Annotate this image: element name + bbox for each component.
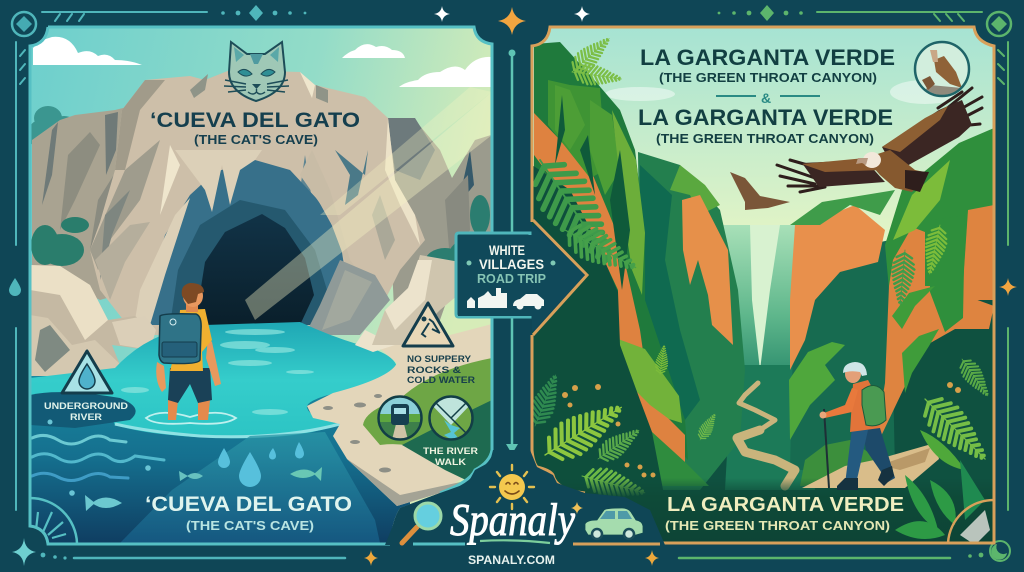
backpack <box>862 385 886 426</box>
waterfall light <box>750 225 780 370</box>
pale clouds <box>605 80 960 104</box>
sign text <box>477 242 546 286</box>
bottom right rule and dots <box>679 553 983 558</box>
sign text: VILLAGES <box>479 256 544 272</box>
underground river caption <box>44 401 128 423</box>
trekking pole <box>824 409 829 488</box>
sun beams <box>245 87 492 320</box>
river blob behind label <box>30 392 136 428</box>
gold sparkle logo <box>571 502 583 514</box>
ruff <box>863 152 881 168</box>
corner medallion top left <box>12 12 36 36</box>
river walk caption <box>423 446 478 468</box>
bottom left sparkle <box>12 538 36 566</box>
icon: car <box>513 294 544 310</box>
white sparkle left <box>434 6 450 22</box>
ferns <box>519 31 997 505</box>
icon: magnifying glass <box>402 503 441 543</box>
left canopy <box>534 42 688 460</box>
distant valley <box>715 225 805 375</box>
left moss right edge <box>612 110 645 295</box>
vulture small <box>730 172 790 210</box>
legs <box>168 400 210 420</box>
hiker rock <box>802 443 939 488</box>
moss lump <box>789 342 845 440</box>
shirt <box>170 309 212 371</box>
rocks on right shore <box>355 255 454 352</box>
icon: white village <box>467 288 507 308</box>
side water drop <box>9 278 21 296</box>
sand lower edge <box>347 459 470 506</box>
canyon titles <box>638 45 895 146</box>
icon: river walk circle <box>429 396 473 440</box>
right orange upper right <box>962 205 994 300</box>
moss below orange <box>645 432 709 486</box>
waves <box>32 435 164 480</box>
green hill <box>363 358 490 445</box>
back leg <box>862 428 895 482</box>
face <box>845 365 861 383</box>
canyon bottom title: LA GARGANTA VERDE <box>667 494 904 516</box>
valley floor <box>725 365 815 490</box>
rock top facets <box>115 72 328 170</box>
clouds <box>33 37 491 87</box>
panel: la garganta verde <box>519 27 997 545</box>
right cave rocks <box>305 260 390 335</box>
side dots <box>466 260 556 266</box>
sunshine icon <box>490 465 534 509</box>
logo plate <box>385 450 665 545</box>
head <box>183 285 203 307</box>
canyon titles: (THE GREEN THROAT CANYON) <box>659 70 877 85</box>
cave title <box>152 112 360 146</box>
ripples <box>146 413 236 424</box>
jacket <box>850 380 880 432</box>
gold berries <box>562 382 961 478</box>
head <box>856 158 868 165</box>
wing feathers <box>777 88 982 192</box>
underground river caption: UNDERGROUND <box>44 401 128 412</box>
slippery caption: NO SUPPERY <box>407 354 472 365</box>
wing left <box>802 160 885 187</box>
back rock right <box>390 126 490 320</box>
canyon titles: (THE GREEN THROAT CANYON) <box>656 131 874 146</box>
dark backing under ferns <box>532 165 665 500</box>
canyon bottom title <box>665 494 904 533</box>
canyon titles: LA GARGANTA VERDE <box>638 105 893 130</box>
tail <box>905 170 929 192</box>
bottom left gold star <box>364 550 378 566</box>
left orange <box>534 113 685 462</box>
helmet <box>843 362 867 376</box>
forest base <box>532 290 994 543</box>
title band <box>532 478 994 543</box>
left moss bright <box>548 80 606 178</box>
crescent moon <box>990 541 1010 561</box>
top right dots and diamond <box>718 5 803 21</box>
white sparkle right <box>574 6 590 22</box>
trees right <box>426 195 490 261</box>
left moss lobes <box>555 85 620 195</box>
pebbles <box>323 394 391 472</box>
stalactites <box>136 150 342 323</box>
main rock <box>90 70 425 335</box>
pack badge <box>170 319 176 325</box>
logo url: SPANALY.COM <box>468 553 555 567</box>
road trip sign <box>456 218 587 335</box>
shorts <box>168 368 212 403</box>
panel border left <box>30 27 492 544</box>
canyon titles: LA GARGANTA VERDE <box>640 45 895 70</box>
right cliff lit moss <box>893 160 950 240</box>
river walk caption: WALK <box>435 457 466 468</box>
beams under water <box>120 432 380 543</box>
wing left top <box>802 158 882 172</box>
sign text: ROAD TRIP <box>477 271 546 286</box>
sign text: WHITE <box>489 242 525 258</box>
slippery caption: ROCKS & <box>407 365 461 376</box>
cave bottom title <box>145 493 352 533</box>
center line through plate <box>530 335 534 450</box>
back rock left <box>32 108 124 300</box>
wing right <box>882 100 972 170</box>
neck <box>186 302 198 312</box>
bubbles <box>48 420 151 496</box>
mid right cliff dark <box>790 240 895 470</box>
cat icon <box>224 42 289 101</box>
corner medallion top right <box>987 12 1011 36</box>
hand <box>820 412 826 418</box>
cave bottom title: (THE CAT'S CAVE) <box>186 518 314 533</box>
sand shore <box>307 324 492 506</box>
icon: green car <box>585 508 643 539</box>
hiker wading <box>146 283 236 424</box>
arm <box>824 388 858 418</box>
right vine curtain <box>930 215 965 332</box>
vulture large <box>777 88 982 192</box>
corner fan right <box>948 500 994 545</box>
warning: underground river <box>62 351 112 393</box>
big moss mass <box>618 339 682 423</box>
bottom left dots and rule <box>41 553 345 560</box>
hair <box>182 283 204 304</box>
side gold star <box>999 278 1017 296</box>
canyon bottom title: (THE GREEN THROAT CANYON) <box>665 518 890 533</box>
water highlights <box>121 329 314 415</box>
ampersand divider <box>716 90 820 106</box>
river walk caption: THE RIVER <box>423 446 478 457</box>
fish center small <box>179 471 203 481</box>
sky <box>30 27 492 543</box>
rock side facets <box>90 118 420 300</box>
mid left dark <box>640 165 700 440</box>
lake shore line <box>115 424 340 437</box>
boots <box>837 466 894 490</box>
mid left orange <box>682 195 733 345</box>
cave title: ‘CUEVA DEL GATO <box>150 109 360 132</box>
vulture medallion <box>915 42 969 100</box>
trees left <box>32 217 89 266</box>
corner fan <box>30 498 77 543</box>
mid left moss <box>670 165 720 215</box>
moss dark drips <box>555 95 630 290</box>
lake <box>30 322 397 438</box>
sky <box>532 27 994 543</box>
slippery caption <box>407 354 475 386</box>
arm right <box>206 338 221 386</box>
top right rule <box>817 12 1008 510</box>
cave mid layer <box>170 200 330 325</box>
mid right cliff orange <box>790 205 885 370</box>
center line top <box>508 50 516 232</box>
body <box>865 150 929 192</box>
hiker <box>820 362 895 490</box>
warning: slippery rocks <box>403 303 453 346</box>
logo wordmark: Spanaly <box>450 494 575 545</box>
arrow outline <box>456 218 587 335</box>
fish center right <box>290 467 322 481</box>
central orange star <box>498 7 526 35</box>
logo underline <box>480 540 550 543</box>
bottom line segments <box>413 542 660 546</box>
cave title: (THE CAT'S CAVE) <box>194 133 318 147</box>
cave interior <box>195 214 314 325</box>
sign box <box>456 233 530 317</box>
ampersand divider: & <box>761 90 771 106</box>
back rock left shadows <box>42 112 120 250</box>
panel: cueva del gato <box>20 27 492 544</box>
top left dots and diamond <box>221 5 306 21</box>
fish left <box>85 495 122 511</box>
backpack <box>159 314 201 364</box>
center line bottom with arrow <box>506 317 518 454</box>
left boulders <box>30 265 156 376</box>
top left rule <box>16 12 207 510</box>
dark hill <box>402 400 492 482</box>
lower deep water <box>30 370 410 543</box>
right cliff green <box>885 128 994 300</box>
cave mouth outer <box>140 160 348 325</box>
moss mound center <box>800 440 880 486</box>
right orange lower <box>873 286 994 453</box>
river path <box>737 383 795 486</box>
distant trees <box>32 106 70 144</box>
wing right edge <box>882 106 948 152</box>
underground river caption: RIVER <box>70 412 102 423</box>
arm left <box>156 362 166 392</box>
water drops <box>218 442 304 487</box>
bottom right gold star <box>645 550 659 566</box>
panel border right <box>532 27 994 543</box>
orange arrow edge <box>533 220 587 335</box>
front leg <box>845 428 868 484</box>
right orange upper left <box>889 227 925 290</box>
mid right cliff moss <box>790 190 895 225</box>
back rock right shadows <box>387 118 474 260</box>
slippery caption: COLD WATER <box>407 375 475 386</box>
cave bottom title: ‘CUEVA DEL GATO <box>145 493 352 516</box>
right hanging moss <box>892 286 939 393</box>
mid left cliff green <box>638 152 745 490</box>
icon: train circle <box>378 396 422 442</box>
pack pocket <box>162 342 197 357</box>
foreground leaves right <box>895 430 985 539</box>
